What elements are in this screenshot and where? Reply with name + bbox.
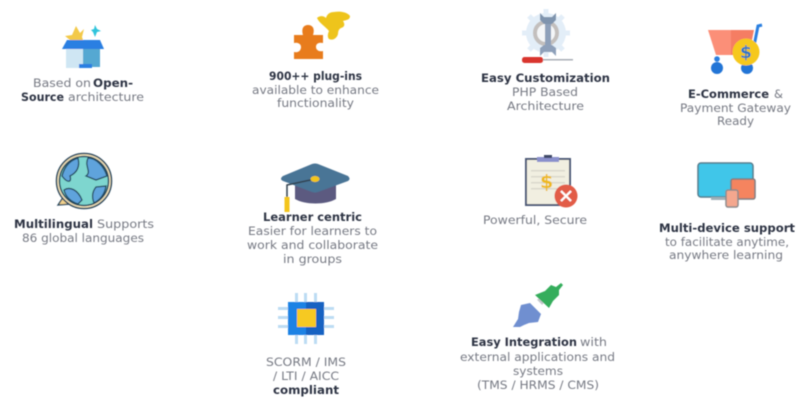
text: multilingual supports: 86 global languages	[22, 231, 144, 245]
text: multi-device support	[659, 221, 795, 262]
icon: graduation cap	[281, 164, 350, 212]
text: easy customization: Architecture	[507, 99, 584, 113]
icon: shopping cart with coin: $	[740, 43, 752, 63]
text: e-commerce and payment gateway: Ready	[717, 114, 754, 128]
text: learner centric: Learner centric	[263, 210, 362, 224]
icon: gear, wrench and screwdriver	[522, 9, 573, 63]
text: e-commerce and payment gateway: &	[774, 87, 783, 101]
feature: open source	[21, 25, 144, 104]
text: easy customization: PHP Based	[512, 85, 578, 99]
text: multi-device support: to facilitate anytime,	[665, 235, 789, 249]
icon: clipboard with warning badge: $	[540, 171, 553, 193]
feature: customization	[481, 9, 610, 113]
icon: connecting plugs	[513, 283, 563, 327]
text: easy integration: (TMS / HRMS / CMS)	[477, 378, 599, 392]
text: based on open-source: architecture	[68, 90, 144, 104]
text: 900++ plug-ins: functionality	[277, 96, 354, 110]
text: easy customization	[481, 71, 610, 113]
text: based on open-source: Open-	[93, 76, 133, 90]
icon: open box with star	[62, 25, 104, 68]
feature: standards compliant	[266, 293, 346, 397]
text: based on open-source	[21, 76, 144, 104]
text: multi-device support: Multi-device support	[659, 221, 795, 235]
text: easy integration	[460, 335, 615, 392]
text: easy integration: Easy Integration	[471, 335, 577, 349]
text: scorm ims lti aicc compliant	[266, 355, 346, 397]
text: powerful, secure: Powerful, Secure	[483, 213, 587, 227]
text: 900++ plug-ins	[252, 69, 379, 110]
text: scorm ims lti aicc compliant: SCORM / IMS	[266, 355, 346, 369]
text: learner centric: in groups	[283, 252, 342, 266]
feature: e-commerce	[680, 25, 791, 128]
text: easy integration: with	[580, 335, 607, 349]
text: scorm ims lti aicc compliant: compliant	[273, 383, 339, 397]
feature: multilingual	[14, 154, 154, 245]
feature: powerful, secure	[483, 155, 587, 227]
text: multi-device support: anywhere learning	[669, 248, 783, 262]
icon: puzzle pieces	[294, 12, 350, 59]
feature: plug-ins	[252, 12, 379, 110]
text: multilingual supports	[14, 217, 154, 245]
feature: easy integration	[460, 283, 615, 392]
feature: multi-device support	[659, 163, 795, 262]
feature: learner centric	[247, 164, 378, 266]
text: learner centric	[247, 210, 378, 266]
text: easy integration: systems	[513, 364, 563, 378]
text: based on open-source: Source	[21, 90, 64, 104]
icon: monitor, tablet and phone	[698, 163, 755, 207]
icon: globe speech bubble	[56, 154, 112, 208]
text: scorm ims lti aicc compliant: / LTI / AICC	[273, 369, 339, 383]
text: easy integration: external applications and	[460, 350, 615, 364]
text: 900++ plug-ins: available to enhance	[252, 83, 379, 97]
text: easy customization: Easy Customization	[481, 71, 610, 85]
text: based on open-source: Based on	[33, 76, 91, 90]
text: e-commerce and payment gateway: Payment Gateway	[680, 101, 791, 115]
text: e-commerce and payment gateway: E-Commerce	[688, 87, 769, 101]
text: multilingual supports: Multilingual	[14, 217, 93, 231]
text: multilingual supports: Supports	[97, 217, 154, 231]
icon: microchip	[278, 293, 334, 344]
text: e-commerce and payment gateway	[680, 87, 791, 128]
text: 900++ plug-ins: 900++ plug-ins	[269, 69, 362, 83]
text: learner centric: Easier for learners to	[248, 224, 377, 238]
text: learner centric: work and collaborate	[247, 238, 378, 252]
